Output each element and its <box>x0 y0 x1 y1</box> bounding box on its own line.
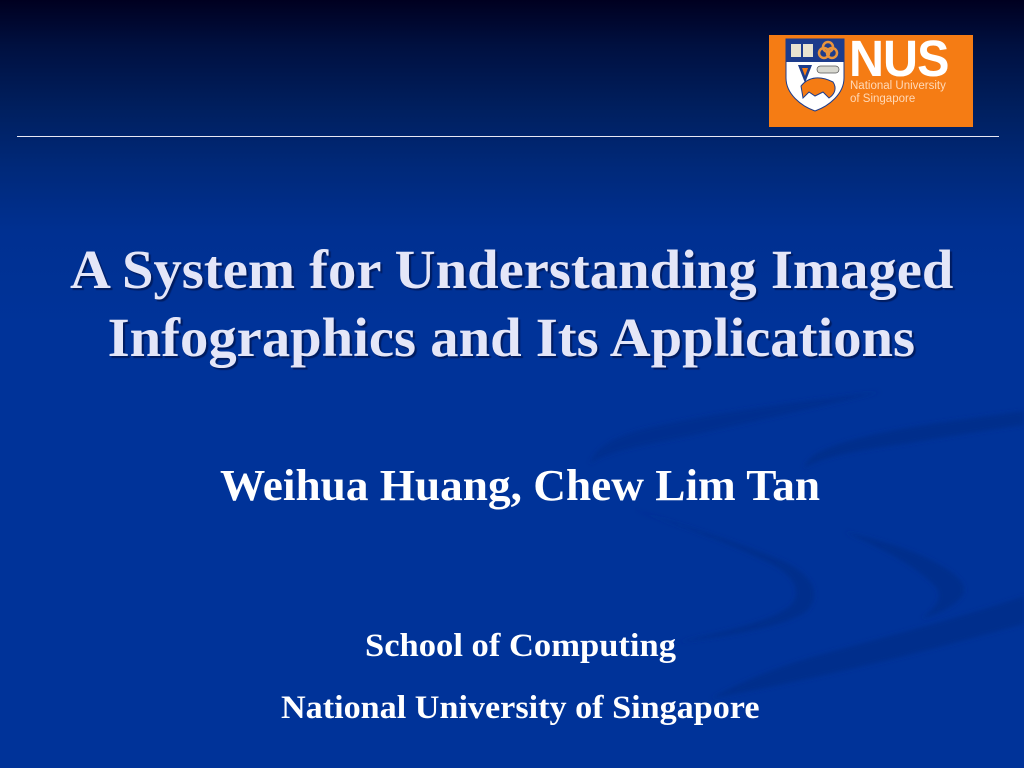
logo subtitle <box>850 80 946 105</box>
logo subtitle: of Singapore <box>850 93 915 105</box>
NUS logo <box>769 35 973 127</box>
title: A System for Understanding Imaged <box>70 239 953 300</box>
affiliation: university: National University of Singapore <box>281 690 760 726</box>
icon: NUS crest <box>786 38 844 112</box>
logo subtitle: National University <box>850 80 946 92</box>
title: Infographics and Its Applications <box>108 307 915 368</box>
title <box>70 239 956 370</box>
header divider line <box>17 136 999 137</box>
authors: Weihua Huang, Chew Lim Tan <box>220 461 820 510</box>
affiliation: school: School of Computing <box>365 628 676 664</box>
